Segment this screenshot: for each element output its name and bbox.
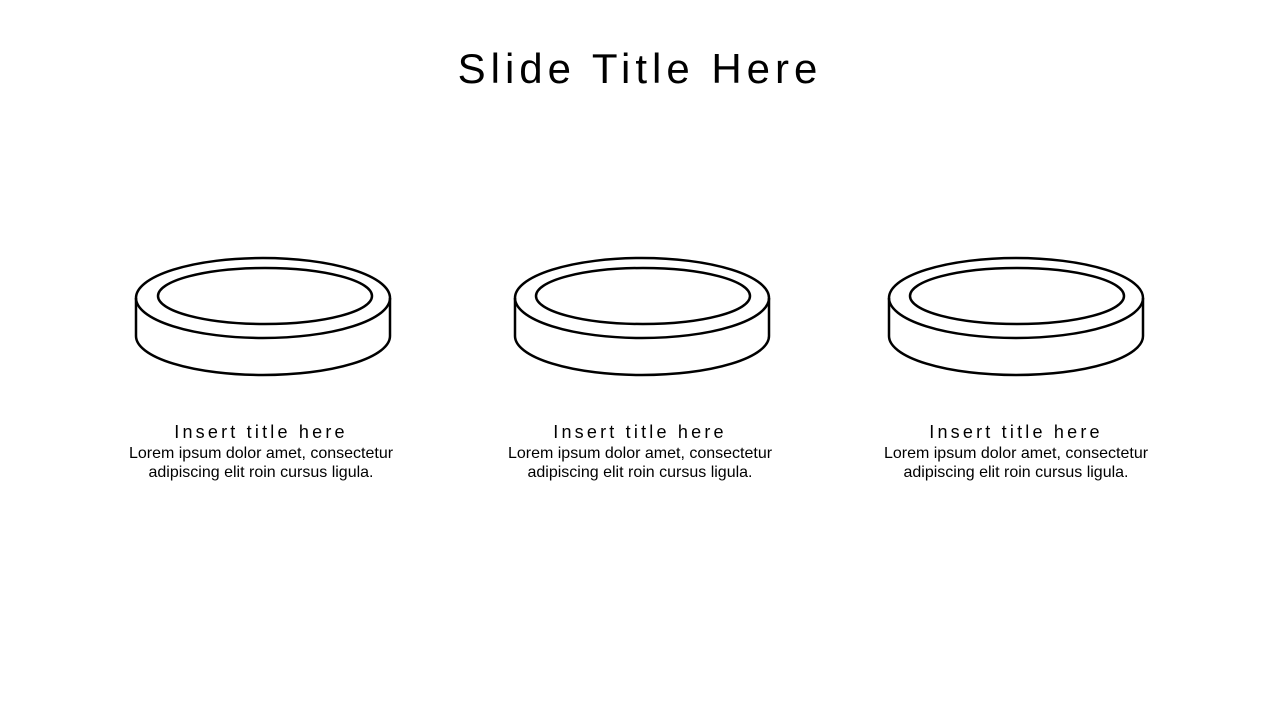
text block 1: Lorem ipsum dolor amet, consectetur xyxy=(129,445,393,462)
title: Slide Title Here xyxy=(458,45,822,92)
text block 1: adipiscing elit roin cursus ligula. xyxy=(148,464,374,481)
icon: coin 3 xyxy=(889,258,1143,375)
text block 1 xyxy=(129,422,393,481)
text block 3: adipiscing elit roin cursus ligula. xyxy=(904,464,1128,481)
text block 2 xyxy=(508,422,772,481)
icon: coin 2 xyxy=(515,258,769,375)
icon: coin 1 xyxy=(136,258,390,375)
text block 3: Insert title here xyxy=(929,422,1103,442)
text block 2: Lorem ipsum dolor amet, consectetur xyxy=(508,445,772,462)
text block 2: adipiscing elit roin cursus ligula. xyxy=(528,464,752,481)
text block 1: Insert title here xyxy=(174,422,348,442)
text block 3: Lorem ipsum dolor amet, consectetur xyxy=(884,445,1148,462)
text block 2: Insert title here xyxy=(553,422,727,442)
text block 3 xyxy=(884,422,1148,481)
